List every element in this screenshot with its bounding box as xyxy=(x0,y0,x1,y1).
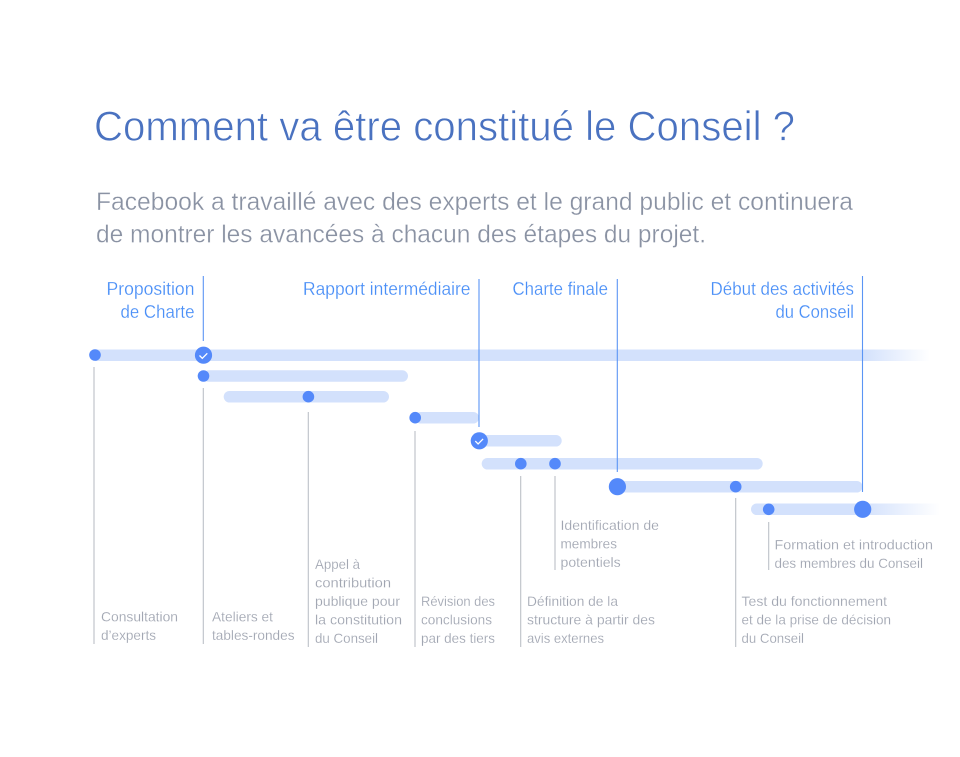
label: ateliers et tables-rondes: tables-rondes xyxy=(212,627,294,643)
label: identification de membres potentiels: Identification de xyxy=(560,517,659,533)
timeline bar: appel à contribution xyxy=(224,391,389,402)
label: consultation d'experts: d’experts xyxy=(101,627,156,643)
dot: test xyxy=(730,481,742,493)
milestone heading: Début des activités du Conseil xyxy=(710,279,854,322)
dot: identification xyxy=(549,458,561,470)
label: consultation d'experts: Consultation xyxy=(101,608,178,624)
timeline bar: après rapport intermédiaire xyxy=(479,435,562,446)
timeline bar: main xyxy=(95,350,930,361)
label: formation et introduction xyxy=(774,536,933,571)
label: révision des conclusions: conclusions xyxy=(421,612,492,628)
timeline bar: définition et identification xyxy=(482,458,763,470)
milestone heading: Proposition de Charte: Proposition xyxy=(106,279,194,299)
label: test du fonctionnement xyxy=(742,593,891,646)
label: appel à contribution: la constitution xyxy=(315,612,402,628)
milestone heading: Rapport intermédiaire: Rapport intermédiaire xyxy=(303,279,470,299)
blue milestone line: Rapport intermédiaire xyxy=(478,279,480,427)
label: appel à contribution xyxy=(315,556,402,646)
blue milestone line: Début des activités xyxy=(862,276,864,492)
label: ateliers et tables-rondes xyxy=(212,608,294,643)
timeline bar: test du fonctionnement xyxy=(617,481,862,492)
dot: révision xyxy=(409,412,421,424)
label: appel à contribution: publique pour xyxy=(315,593,400,609)
label: révision des conclusions: par des tiers xyxy=(421,630,495,646)
subtitle xyxy=(96,188,853,249)
label: appel à contribution: contribution xyxy=(315,574,391,590)
dot: consultation xyxy=(89,349,101,361)
milestone heading: Proposition de Charte xyxy=(106,279,194,322)
label: définition de la structure: Définition de la xyxy=(527,593,618,609)
milestone heading: Proposition de Charte: de Charte xyxy=(120,302,194,322)
label: test du fonctionnement: et de la prise de décision xyxy=(742,612,891,628)
milestone heading: Début des activités du Conseil: du Conseil xyxy=(776,302,854,322)
label: test du fonctionnement: du Conseil xyxy=(742,630,804,646)
label: test du fonctionnement: Test du fonctionnement xyxy=(742,593,887,609)
label: formation et introduction: des membres du Conseil xyxy=(774,555,923,571)
dot: formation xyxy=(763,504,774,515)
label: définition de la structure xyxy=(527,593,655,646)
label: définition de la structure: avis externes xyxy=(527,630,604,646)
label: ateliers et tables-rondes: Ateliers et xyxy=(212,608,273,624)
timeline bar: ateliers xyxy=(203,370,408,382)
label: appel à contribution: du Conseil xyxy=(315,630,378,646)
blue milestone line: Proposition de Charte xyxy=(202,276,204,341)
dot: début des activités xyxy=(854,501,871,518)
label: identification de membres potentiels: potentiels xyxy=(560,554,621,570)
label: révision des conclusions: Révision des xyxy=(421,593,495,609)
icon: check milestone 1 xyxy=(195,347,212,364)
label: identification de membres potentiels xyxy=(560,517,659,570)
label: formation et introduction: Formation et introduction xyxy=(774,536,933,552)
icon: check milestone 2 xyxy=(471,432,488,449)
milestone heading: Début des activités du Conseil: Début des activités xyxy=(710,279,854,299)
timeline bar: formation xyxy=(751,504,940,515)
title: Comment va être constitué le Conseil ? xyxy=(94,102,795,150)
dot: appel xyxy=(303,391,314,403)
gray leader lines xyxy=(94,367,769,647)
label: identification de membres potentiels: membres xyxy=(560,536,617,552)
label: révision des conclusions xyxy=(421,593,495,646)
dot: définition xyxy=(515,458,527,470)
blue milestone line: Charte finale xyxy=(616,279,618,472)
label: appel à contribution: Appel à xyxy=(315,556,360,572)
label: définition de la structure: structure à partir des xyxy=(527,612,655,628)
milestone heading: Charte finale: Charte finale xyxy=(512,279,608,299)
dot: charte finale xyxy=(609,478,626,495)
timeline bar: révision xyxy=(415,412,479,424)
dot: ateliers xyxy=(198,370,209,382)
subtitle: de montrer les avancées à chacun des étapes du projet. xyxy=(96,221,706,249)
label: consultation d'experts xyxy=(101,608,178,643)
subtitle: Facebook a travaillé avec des experts et le grand public et continuera xyxy=(96,188,853,216)
